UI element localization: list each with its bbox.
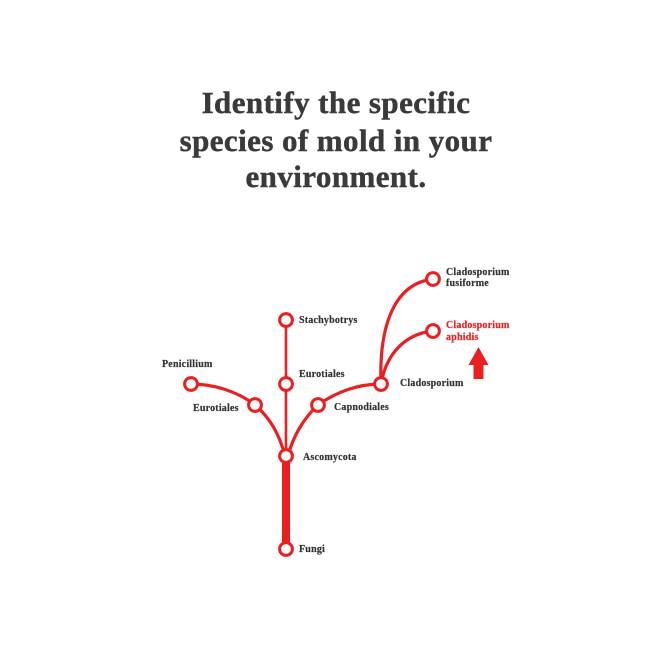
- label: Cladosporium: Cladosporium: [400, 378, 464, 389]
- arrow: highlight pointing up: [468, 347, 488, 379]
- label: Penicillium: Penicillium: [162, 359, 213, 370]
- node: Eurotiales center: [280, 378, 292, 390]
- node: Capnodiales: [312, 399, 324, 411]
- title: Identify the specific: [202, 85, 470, 120]
- node: Ascomycota: [280, 450, 292, 462]
- node: Fungi: [280, 543, 292, 555]
- node: Cladosporium aphidis: [427, 325, 439, 337]
- label: Cladosporium fusiforme: Cladosporium: [446, 267, 510, 278]
- label: Fungi: Fungi: [299, 544, 325, 555]
- branch: Stachybotrys stem: [285, 320, 287, 456]
- branch: left Eurotiales to Penicillium: [191, 384, 285, 456]
- label: Stachybotrys: Stachybotrys: [299, 315, 358, 326]
- branch: Capnodiales to Cladosporium: [288, 384, 381, 456]
- phylogenetic tree diagram: [162, 267, 510, 555]
- label: Eurotiales left: Eurotiales: [193, 403, 239, 414]
- label: Capnodiales: Capnodiales: [334, 402, 389, 413]
- node: Eurotiales left: [249, 399, 261, 411]
- branch: Cladosporium fusiforme: [381, 279, 433, 384]
- trunk: Fungi to Ascomycota: [282, 456, 290, 549]
- branch: Cladosporium aphidis: [381, 331, 433, 384]
- label: Cladosporium aphidis: aphidis: [446, 332, 479, 343]
- label: Ascomycota: Ascomycota: [303, 452, 357, 463]
- label: Cladosporium fusiforme: fusiforme: [446, 278, 489, 289]
- node: Cladosporium: [375, 378, 387, 390]
- node: Cladosporium fusiforme: [427, 273, 439, 285]
- label: Cladosporium aphidis: Cladosporium: [446, 320, 510, 331]
- node: Stachybotrys: [280, 314, 292, 326]
- label: Eurotiales center: Eurotiales: [299, 369, 345, 380]
- title: environment.: [246, 159, 426, 194]
- title: species of mold in your: [180, 123, 492, 158]
- node: Penicillium: [185, 378, 197, 390]
- title: [180, 85, 492, 194]
